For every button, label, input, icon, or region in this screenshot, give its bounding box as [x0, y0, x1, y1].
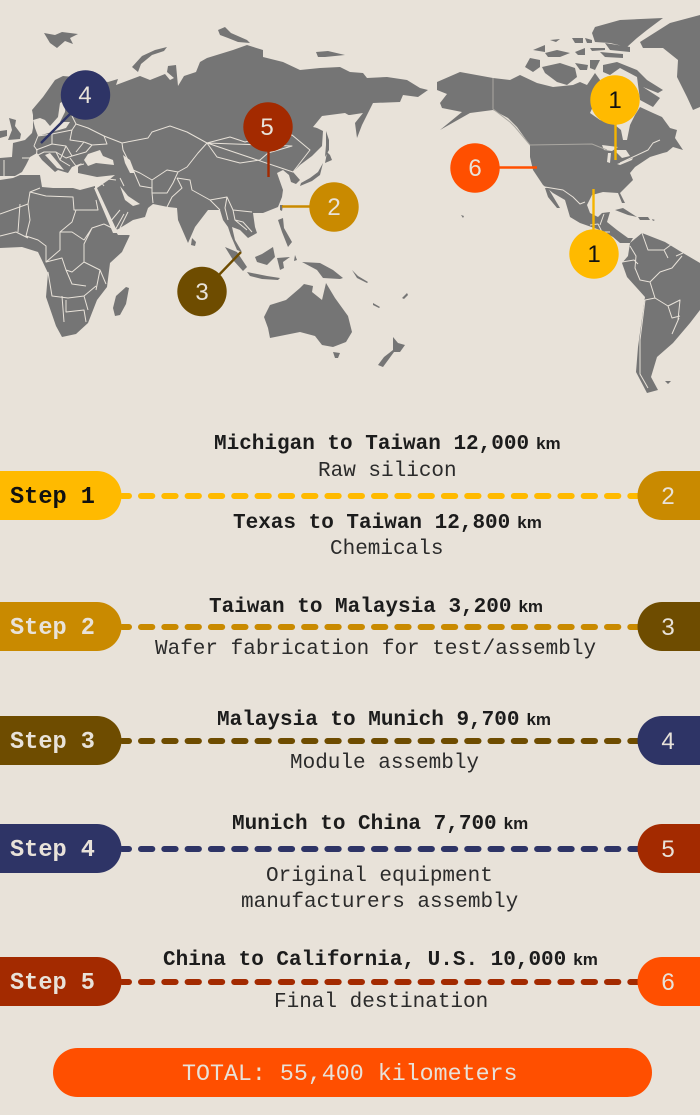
step 4 row	[0, 813, 700, 914]
route: Munich to China: Munich to China 7,700 km	[232, 813, 528, 836]
marker 2: Taiwan: 2	[327, 194, 341, 221]
sea: Caspian	[123, 155, 135, 173]
destination pill 2	[637, 471, 700, 520]
step 3 row	[0, 709, 700, 775]
inland seas	[33, 100, 633, 233]
borders: Asia	[98, 126, 310, 232]
cargo: Raw silicon: Raw silicon	[318, 460, 457, 483]
marker 3: Malaysia	[177, 252, 241, 316]
marker 5: China	[243, 102, 293, 177]
dashed route 4	[122, 846, 640, 852]
borders: Americas	[545, 140, 683, 388]
sea: Okhotsk	[313, 113, 352, 130]
cargo: Original equipment manufacturers assembly: manufacturers assembly	[241, 891, 518, 914]
pill label: Step 2: Step 2	[10, 615, 95, 642]
destination number 2: 2	[661, 483, 675, 510]
marker 4: Munich: 4	[78, 82, 92, 109]
sea: Adriatic	[45, 153, 64, 170]
dashed route 5	[122, 979, 640, 985]
land: Franz Josef Land	[218, 27, 250, 43]
cargo: Chemicals: Chemicals	[330, 538, 443, 561]
total bar	[53, 1048, 652, 1097]
step 2 row	[0, 596, 700, 661]
marker 6: California	[450, 143, 537, 193]
route: Taiwan to Malaysia: Taiwan to Malaysia 3,200 km	[209, 596, 543, 619]
borders: Europe	[4, 116, 122, 176]
cargo: Wafer fabrication: Wafer fabrication for test/assembly	[155, 638, 596, 661]
land: Southeast Asian islands	[225, 218, 343, 280]
dashed route 2	[122, 624, 640, 630]
marker 1: Michigan: 1	[608, 87, 622, 114]
route: Texas to Taiwan: Texas to Taiwan 12,800 km	[233, 512, 542, 535]
pill: Step 5	[0, 957, 122, 1006]
land: Canadian Arctic islands	[525, 18, 663, 107]
route: Michigan to Taiwan: Michigan to Taiwan 12,000 km	[214, 433, 561, 456]
land: Africa	[0, 175, 130, 337]
destination pill 4	[637, 716, 700, 765]
pill label: Step 5: Step 5	[10, 970, 95, 997]
destination pill 6	[637, 957, 700, 1006]
pill: Step 4	[0, 824, 122, 873]
world map	[0, 15, 700, 393]
land: Sakhalin, Japan, Taiwan	[280, 131, 332, 211]
marker 3: Malaysia: 3	[195, 279, 209, 306]
marker 1: Texas	[569, 189, 619, 279]
land: South America	[622, 233, 700, 393]
sea: Baltic	[33, 100, 70, 136]
sea: Great Lakes	[602, 145, 633, 165]
cargo: Original equipment manufacturers assembly: Original equipment	[266, 865, 493, 888]
destination number 6: 6	[661, 969, 675, 996]
land: Caribbean islands	[615, 208, 655, 221]
marker 4: Munich	[41, 70, 110, 143]
route: Malaysia to Munich: Malaysia to Munich 9,700 km	[217, 709, 551, 732]
cargo: Module assembly: Module assembly	[290, 752, 479, 775]
marker 6: California: 6	[468, 155, 482, 182]
destination number 3: 3	[661, 614, 675, 641]
marker 1: Michigan	[590, 75, 640, 160]
pill: Step 1	[0, 471, 122, 520]
land: North America	[437, 72, 683, 243]
destination number 5: 5	[661, 836, 675, 863]
dashed route 3	[122, 738, 640, 744]
country borders	[0, 116, 683, 388]
pill label: Step 1: Step 1	[10, 484, 95, 511]
step 1 row	[0, 433, 700, 561]
destination pill 5	[637, 824, 700, 873]
marker 2: Taiwan	[282, 182, 359, 232]
land: New Zealand	[378, 337, 405, 367]
marker 1: Texas: 1	[587, 241, 601, 268]
land: Australia	[264, 283, 352, 358]
borders: Africa	[0, 188, 130, 322]
land: Sri Lanka, Madagascar	[113, 238, 196, 316]
land: Baja California	[545, 188, 560, 208]
pill: Step 2	[0, 602, 122, 651]
sea: Persian Gulf	[120, 186, 140, 206]
sea: Black Sea	[84, 150, 114, 166]
land: Eurasia	[0, 45, 428, 252]
land: New Siberian Islands	[316, 51, 345, 57]
cargo: Final destination: Final destination	[274, 991, 488, 1014]
step 5 row	[0, 949, 700, 1014]
pill: Step 3	[0, 716, 122, 765]
land: Greenland	[640, 15, 700, 110]
land: Svalbard	[44, 32, 78, 48]
destination pill 3	[637, 602, 700, 651]
sea: Red Sea	[94, 188, 118, 233]
marker 5: China: 5	[260, 114, 274, 141]
pill label: Step 4: Step 4	[10, 837, 95, 864]
land: small Pacific islands	[352, 215, 671, 384]
land: Great Britain and Ireland	[0, 118, 21, 140]
dashed route 1	[122, 493, 640, 499]
route: China to California: China to California, U.S. 10,000 km	[163, 949, 598, 972]
total bar: TOTAL: 55,400 kilometers	[182, 1061, 518, 1087]
destination number 4: 4	[661, 728, 675, 755]
pill label: Step 3: Step 3	[10, 729, 95, 756]
land: Novaya Zemlya	[132, 47, 167, 72]
borders: Canada and Alaska	[493, 78, 607, 150]
